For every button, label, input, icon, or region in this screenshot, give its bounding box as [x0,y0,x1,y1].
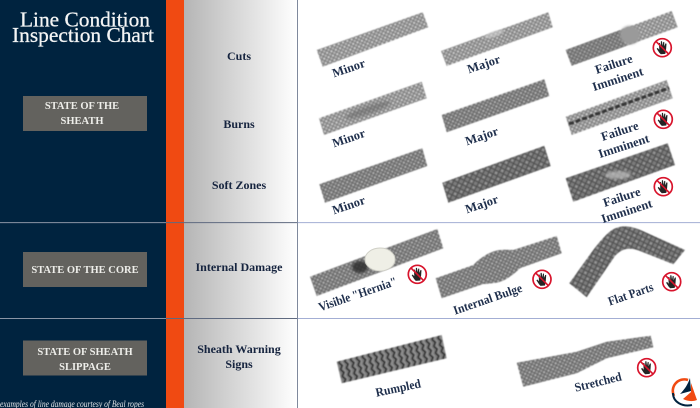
rope: burns failure imminent: Failure [599,118,641,144]
title: Line Condition [20,8,151,32]
rope: internal bulge: Internal Bulge [451,281,524,318]
category: state of the sheath: SHEATH [61,116,103,127]
label: Sheath Warning Signs: Signs [225,357,253,371]
label: Sheath Warning Signs [197,342,281,371]
label: Burns: Burns [223,117,255,131]
rope: burns failure imminent: Imminent [597,131,652,161]
rope: soft zones failure imminent: Imminent [600,196,655,226]
rope: soft zones major [442,146,551,216]
rope: cuts major: Major [465,52,502,76]
rope: burns failure imminent [566,80,673,161]
category: state of the sheath [23,96,147,131]
category: state of the core [23,252,147,287]
panel: white examples area [298,0,700,408]
rope: soft zones failure imminent: Failure [601,184,643,210]
icon: no-touch warning [654,178,672,196]
label: Sheath Warning Signs: Sheath Warning [197,342,281,356]
title [12,8,154,47]
rope: cuts minor: Minor [330,56,367,80]
rope: burns major: Major [463,124,500,148]
category: state of sheath slippage [23,340,147,376]
rope: soft zones minor [319,148,427,217]
title: Inspection Chart [12,23,154,47]
category: state of sheath slippage: STATE OF SHEATH [37,347,133,358]
rope: cuts failure imminent [566,11,678,94]
rope: flat parts [569,226,685,308]
rope: stretched: Stretched [573,370,623,395]
panel: orange accent stripe [166,0,184,408]
icon: no-touch warning [408,265,426,283]
rope: flat parts: Flat Parts [606,280,655,308]
category: state of sheath slippage: SLIPPAGE [59,362,111,373]
rope: cuts minor [317,12,428,80]
category: state of the core: STATE OF THE CORE [31,265,139,276]
rope: burns minor: Minor [330,126,367,150]
rope: soft zones minor: Minor [330,193,367,217]
icon: no-touch warning [638,359,656,377]
label: Cuts: Cuts [227,49,251,63]
rope: rumpled: Rumpled [374,376,422,400]
icon: no-touch warning [663,273,681,291]
rope: cuts failure imminent: Failure [593,51,635,77]
label: Soft Zones: Soft Zones [212,178,266,192]
rope: rumpled [337,335,447,400]
icon: no-touch warning [533,270,551,288]
rope: burns major [442,79,549,148]
rope: stretched [517,336,653,395]
rope: burns minor [319,82,427,150]
rope: soft zones major: Major [463,192,500,216]
panel: grey gradient damage-type column [184,0,297,408]
rope: visible hernia: Visible "Hernia" [317,274,399,314]
panel: navy category column [0,0,166,408]
rope: cuts failure imminent: Imminent [591,64,646,94]
icon: sailboat logo [673,378,697,405]
rope: internal bulge [436,236,562,318]
rope: soft zones failure imminent [566,143,675,226]
label: Internal Damage: Internal Damage [196,260,283,274]
icon: no-touch warning [653,39,671,57]
category: state of the sheath: STATE OF THE [45,101,119,112]
icon: no-touch warning [654,110,672,128]
rope: cuts major [441,12,553,76]
rope: visible hernia [310,229,443,314]
